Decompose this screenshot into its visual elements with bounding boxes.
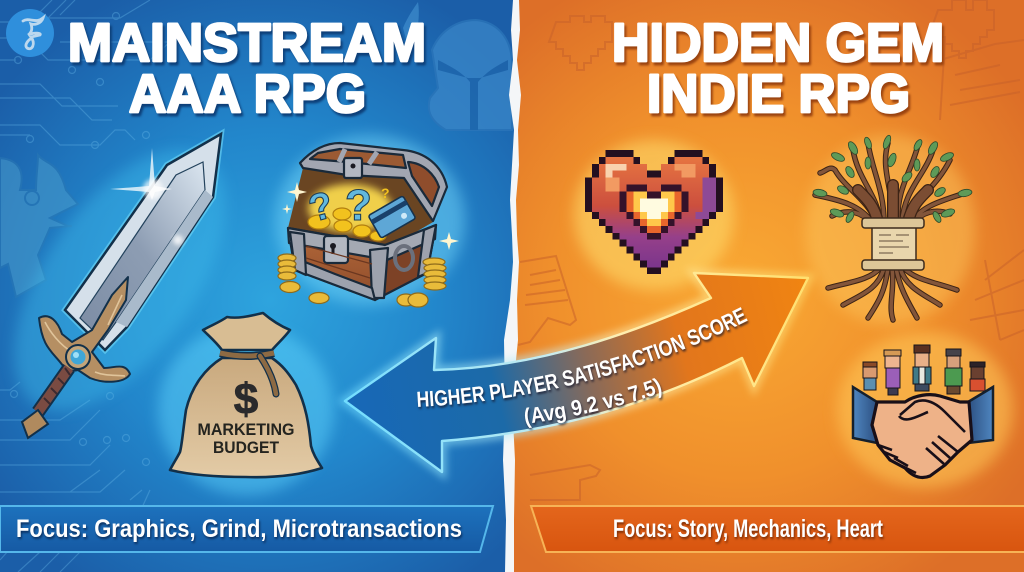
question marks: ?: [345, 181, 372, 230]
coins around chest: [278, 254, 446, 307]
arrow label: satisfaction score: HIGHER PLAYER SATISFACTION SCORE: [417, 307, 750, 410]
hilt guard: [39, 277, 130, 382]
dollar sign: $: [234, 375, 258, 424]
credit card: [368, 196, 416, 238]
sword sparkle: [110, 148, 183, 245]
icon: treasure chest: [275, 135, 465, 307]
question marks: [304, 181, 390, 231]
arrow label: averages: (Avg 9.2 vs 7.5): [524, 378, 664, 432]
question marks: ?: [381, 185, 390, 201]
bag body: [170, 358, 322, 477]
handle: [38, 368, 70, 412]
icon: marketing budget bag: [158, 313, 334, 495]
heart outline: [585, 150, 723, 274]
leaves: [812, 134, 973, 224]
title: mainstream AAA RPG: AAA RPG: [129, 64, 366, 124]
bag top frill: [203, 313, 290, 350]
icon: sword: [0, 114, 267, 446]
background: circuit pattern: [0, 0, 170, 572]
inner heart: [620, 184, 688, 240]
rope tie: [220, 353, 276, 394]
chest interior: [288, 168, 433, 250]
blade: [65, 134, 221, 350]
focus bar: mainstream: [0, 506, 493, 552]
chest body: [288, 225, 436, 300]
roots: [828, 268, 957, 320]
gold coins in chest: [308, 208, 386, 241]
icon: pixel heart: [574, 140, 734, 290]
panel: hidden gem background with torn edge: [503, 0, 1024, 572]
pommel: [22, 410, 48, 438]
clasped hands: [872, 395, 972, 478]
background: faint helmet: [403, 2, 512, 130]
focus bar: hidden gem: Focus: Story, Mechanics, Heart: [613, 515, 883, 543]
bag label: BUDGET: [213, 439, 279, 457]
title: hidden gem indie RPG: INDIE RPG: [647, 64, 910, 124]
title: hidden gem indie RPG: HIDDEN GEM: [612, 13, 944, 73]
icon: pixel handshake and community: [837, 332, 1013, 488]
title: mainstream AAA RPG: MAINSTREAM: [68, 13, 426, 73]
bag label: [198, 421, 294, 457]
pixel people: [863, 345, 985, 395]
background: faint right-side scrolls and hearts: [518, 0, 1024, 500]
branches: [815, 143, 965, 320]
scroll: [862, 218, 924, 270]
left cuff: [853, 387, 877, 443]
logo badge: [6, 9, 54, 57]
bag label: MARKETING: [198, 421, 294, 439]
double arrow: player satisfaction: [338, 266, 815, 482]
background: faint armor: [0, 155, 78, 297]
chest sparkles: [282, 182, 459, 250]
heart fill: [592, 157, 716, 267]
focus bar: mainstream: Focus: Graphics, Grind, Microtransactions: [16, 515, 462, 543]
title: hidden gem indie RPG: [612, 13, 944, 124]
right cuff: [968, 387, 993, 443]
question marks: ?: [304, 184, 338, 231]
chest lid: [300, 143, 447, 221]
title: mainstream AAA RPG: [68, 13, 426, 124]
gem: [66, 345, 90, 369]
panel: mainstream background: [0, 0, 525, 572]
focus bar: hidden gem: [531, 506, 1024, 552]
icon: tree with scroll: [805, 134, 975, 325]
